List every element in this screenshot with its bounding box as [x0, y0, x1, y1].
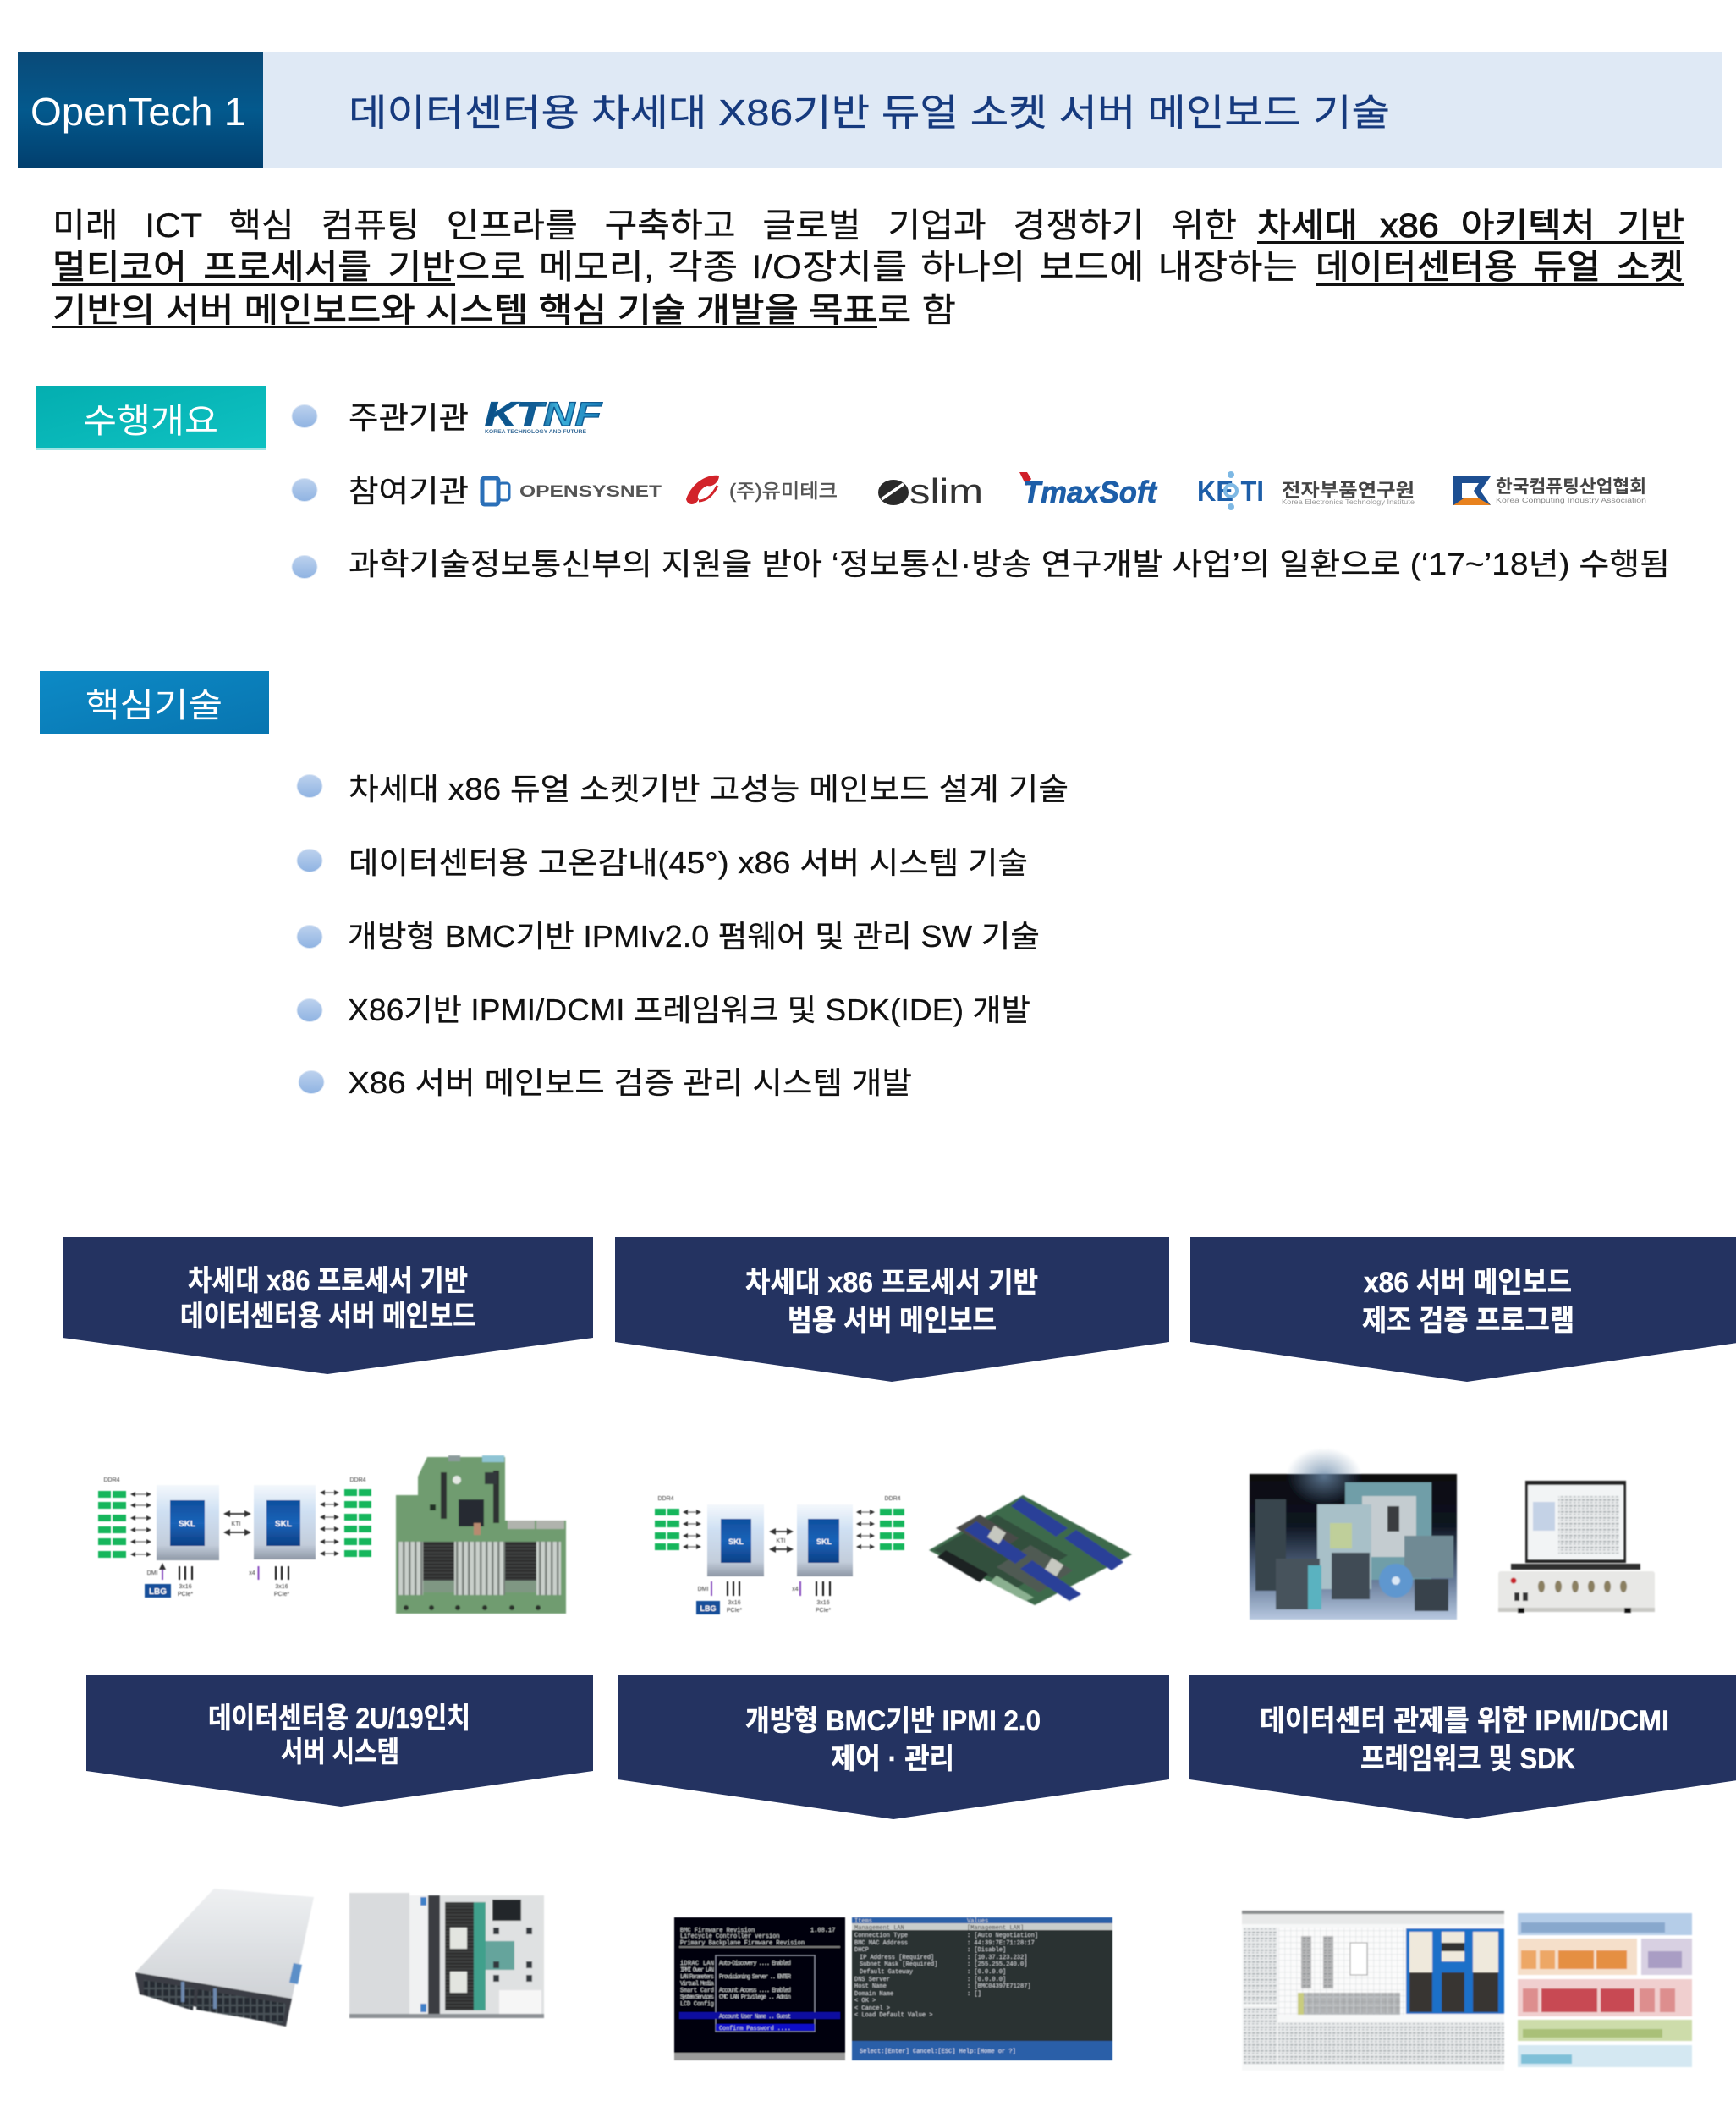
BMC configuration terminal screenshot: Domain Name — [854, 1991, 893, 1998]
BMC configuration terminal screenshot — [852, 1917, 1112, 2060]
KTI link — [772, 1532, 790, 1549]
PCIe and DMI links: 3x16 — [728, 1600, 741, 1606]
PCIe and DMI links: DMI — [698, 1587, 708, 1592]
BIOS console screenshot: 1.08.17 — [810, 1928, 835, 1934]
banner: verification program: x86 서버 메인보드 — [1364, 1267, 1572, 1299]
banner: 2U server system: 서버 시스템 — [281, 1736, 399, 1768]
BIOS console screenshot: LCD Config — [680, 2001, 714, 2008]
framework architecture block diagram — [1518, 1913, 1692, 2067]
core technology list — [297, 772, 1069, 1100]
banner: general purpose mainboard — [615, 1237, 1169, 1382]
architecture diagram 1: DDR4 — [103, 1477, 120, 1483]
CPU 2: SKL — [816, 1537, 832, 1546]
PCIe and DMI links: PCIe* — [178, 1592, 193, 1598]
PCIe and DMI links: LBG — [700, 1604, 716, 1613]
logo: OPENSYSNET: OPENSYSNET — [519, 483, 662, 501]
banner: 2U server system: 데이터센터용 2U/19인치 — [208, 1702, 470, 1735]
intro paragraph: 데이터센터용 듀얼 소켓 — [1316, 249, 1684, 286]
KTI link — [227, 1514, 248, 1532]
BMC configuration terminal screenshot: Items — [854, 1918, 872, 1925]
BIOS console screenshot: Primary Backplane Firmware Revision — [680, 1940, 805, 1947]
PCIe and DMI links: 3x16 — [179, 1584, 192, 1590]
logo: TmaxSoft: TmaxSoft — [1023, 475, 1158, 509]
BIOS console screenshot: CMC LAN Privilege .. Admin — [719, 1994, 791, 2001]
banner: 2U server system — [86, 1675, 593, 1807]
bullet — [292, 479, 317, 501]
BMC configuration terminal screenshot: DHCP — [854, 1947, 869, 1954]
BMC configuration terminal screenshot: < Load Default Value > — [854, 2012, 932, 2019]
BIOS console screenshot: Provisioning Server .. ENTER — [719, 1974, 792, 1981]
BIOS console screenshot: IPMI Over LAN — [680, 1967, 714, 1974]
server chassis open top view — [349, 1893, 544, 2018]
banner: general purpose mainboard: 범용 서버 메인보드 — [788, 1305, 997, 1337]
intro paragraph: 으로 메모리, 각종 I/O장치를 하나의 보드에 내장하는 — [455, 249, 1298, 286]
header bar — [18, 52, 1722, 168]
BMC configuration terminal screenshot: : [Auto Negotiation] — [967, 1933, 1038, 1939]
logo: OPENSYSNET — [482, 478, 662, 504]
CPU 1 — [707, 1504, 764, 1576]
BIOS console screenshot: LAN Parameters — [680, 1974, 714, 1981]
logo: 한국컴퓨팅산업협회: 한국컴퓨팅산업협회 — [1496, 477, 1646, 497]
banner: open BMC IPMI — [618, 1675, 1169, 1819]
BIOS console screenshot: Account User Name .. Guest — [719, 2014, 791, 2021]
PCIe and DMI links: 3x16 — [816, 1600, 830, 1606]
bullet — [292, 404, 317, 428]
header title panel — [263, 52, 1722, 168]
PCIe and DMI links: x4 — [249, 1570, 255, 1576]
overview item: lead organisation — [292, 396, 603, 435]
architecture diagram 1 — [98, 1477, 371, 1598]
architecture diagram 2: DDR4 — [657, 1496, 674, 1502]
BMC configuration terminal screenshot: Values — [967, 1918, 988, 1925]
CPU 1: SKL — [728, 1537, 744, 1546]
DDR4 right modules — [344, 1489, 371, 1557]
BIOS console screenshot: iDRAC LAN — [680, 1961, 714, 1967]
PCIe and DMI links — [696, 1581, 831, 1614]
CPU 1: SKL — [179, 1520, 195, 1529]
header label panel: OpenTech 1: OpenTech 1 — [30, 90, 246, 134]
intro paragraph — [52, 207, 1684, 329]
DDR4 right modules — [880, 1509, 904, 1550]
logo: 한국컴퓨팅산업협회: Korea Computing Industry Association — [1496, 497, 1646, 504]
header label panel: OpenTech 1 — [18, 52, 263, 168]
logo: eslim: slim — [909, 471, 983, 511]
PCIe and DMI links: DMI — [147, 1570, 157, 1576]
PCIe and DMI links: PCIe* — [816, 1608, 831, 1614]
banner: verification program: 제조 검증 프로그램 — [1362, 1305, 1574, 1337]
logo: 한국컴퓨팅산업협회 — [1453, 476, 1646, 505]
BIOS console screenshot: Account Access .... Enabled — [719, 1988, 791, 1994]
item 2: 데이터센터용 고온감내(45°) x86 서버 시스템 기술 — [349, 845, 1028, 880]
architecture diagram 2: DDR4 — [884, 1496, 901, 1502]
BMC configuration terminal screenshot: BMC MAC Address — [854, 1940, 908, 1947]
logo: KTNF: KTNF — [485, 396, 603, 433]
item 3: 개방형 BMC기반 IPMIv2.0 펌웨어 및 관리 SW 기술 — [348, 919, 1040, 954]
banner: datacenter mainboard — [63, 1237, 593, 1374]
BIOS console screenshot: Lifecycle Controller version — [680, 1933, 780, 1940]
BMC configuration terminal screenshot: : [BMC04397E71287] — [967, 1983, 1031, 1990]
header title panel: 데이터센터용 차세대 X86기반 듀얼 소켓 서버 메인보드 기술 — [349, 92, 1390, 134]
CPU 1 — [157, 1485, 219, 1560]
banner: open BMC IPMI: 제어 · 관리 — [831, 1743, 954, 1775]
intro paragraph: 기반의 서버 메인보드와 시스템 핵심 기술 개발을 목표 — [52, 292, 877, 329]
framework tool screenshot — [1242, 1911, 1504, 2071]
BMC configuration terminal screenshot: : [Disable] — [967, 1947, 1006, 1954]
bullet — [292, 555, 317, 579]
logo: KETI — [1197, 471, 1415, 510]
mainboard photo 2 — [929, 1495, 1132, 1605]
architecture diagram 2 — [655, 1496, 904, 1614]
BIOS console screenshot: Confirm Password .... — [719, 2026, 791, 2032]
intro paragraph: 미래 ICT 핵심 컴퓨팅 인프라를 구축하고 글로벌 기업과 경쟁하기 위한 — [52, 207, 1237, 245]
BMC configuration terminal screenshot: [Management LAN] — [967, 1925, 1024, 1932]
logo: KETI: Korea Electronics Technology Institute — [1282, 498, 1415, 506]
logo: KETI: KE TI — [1197, 476, 1264, 508]
overview item: participating organisations: 참여기관 — [349, 474, 469, 509]
BIOS console screenshot: System Services — [680, 1994, 714, 2001]
PCIe and DMI links: 3x16 — [275, 1584, 288, 1590]
BMC configuration terminal screenshot: Default Gateway — [860, 1969, 913, 1976]
BMC configuration terminal screenshot: : [10.37.123.232] — [967, 1955, 1027, 1961]
server chassis front view — [135, 1889, 314, 2027]
BMC configuration terminal screenshot: Host Name — [854, 1983, 887, 1990]
BMC configuration terminal screenshot: < Cancel > — [854, 2005, 890, 2012]
logo: KETI: 전자부품연구원 — [1282, 480, 1415, 501]
section tag: 수행개요: 수행개요 — [83, 403, 218, 440]
BMC configuration terminal screenshot: < OK > — [854, 1998, 876, 2005]
banner: IPMI/DCMI framework: 데이터센터 관제를 위한 IPMI/DCMI — [1260, 1705, 1669, 1737]
BIOS console screenshot: Virtual Media — [680, 1981, 714, 1988]
BIOS console screenshot — [674, 1917, 845, 2060]
banner: datacenter mainboard: 데이터센터용 서버 메인보드 — [180, 1301, 476, 1333]
BIOS console screenshot: BMC Firmware Revision — [680, 1928, 755, 1934]
BMC configuration terminal screenshot: : [255.255.240.0] — [967, 1961, 1027, 1968]
banner: IPMI/DCMI framework: 프레임워크 및 SDK — [1360, 1743, 1575, 1775]
KTI link: KTI — [232, 1521, 240, 1527]
PCIe and DMI links: PCIe* — [727, 1608, 742, 1614]
CPU 2: SKL — [275, 1520, 292, 1529]
BMC configuration terminal screenshot: : [0.0.0.0] — [967, 1969, 1006, 1976]
section tag: 핵심기술 — [40, 671, 269, 734]
control system photo — [1250, 1448, 1457, 1620]
BMC configuration terminal screenshot: : [0.0.0.0] — [967, 1977, 1006, 1983]
banner: verification program — [1190, 1237, 1736, 1382]
banner: general purpose mainboard: 차세대 x86 프로세서 기반 — [745, 1267, 1038, 1299]
item 5: X86 서버 메인보드 검증 관리 시스템 개발 — [348, 1065, 912, 1100]
intro paragraph: 차세대 x86 아키텍처 기반 — [1257, 207, 1684, 245]
BMC configuration terminal screenshot: Subnet Mask [Required] — [860, 1961, 937, 1968]
KTI link: KTI — [777, 1538, 785, 1544]
BMC configuration terminal screenshot: : [] — [967, 1991, 981, 1998]
item 4: X86기반 IPMI/DCMI 프레임워크 및 SDK(IDE) 개발 — [348, 993, 1030, 1027]
overview item: lead organisation: 주관기관 — [349, 400, 469, 435]
BIOS console screenshot: Smart Card — [680, 1988, 714, 1994]
BMC configuration terminal screenshot: IP Address [Required] — [860, 1955, 934, 1961]
BIOS console screenshot: Auto-Discovery .... Enabled — [719, 1961, 791, 1967]
BMC configuration terminal screenshot: Select:[Enter] Cancel:[ESC] Help:[Home or ?] — [860, 2049, 1016, 2055]
intro paragraph: 로 함 — [877, 292, 956, 329]
DDR4 left modules — [655, 1509, 679, 1550]
DDR4 left modules — [98, 1491, 126, 1558]
CPU 2 — [797, 1504, 853, 1576]
CPU 2 — [254, 1485, 316, 1559]
logo: KTNF: KOREA TECHNOLOGY AND FUTURE — [485, 429, 587, 435]
PCIe and DMI links: PCIe* — [274, 1592, 289, 1598]
banner: IPMI/DCMI framework — [1189, 1675, 1736, 1819]
PCIe and DMI links: x4 — [792, 1587, 799, 1592]
BMC configuration terminal screenshot: Management LAN — [854, 1925, 904, 1932]
overview item: funding note: 과학기술정보통신부의 지원을 받아 ‘정보통신·방송 연구개발 사업’의 일환으로 (‘17~’18년) 수행됨 — [349, 547, 1670, 581]
intro paragraph: 멀티코어 프로세서를 기반 — [52, 249, 455, 286]
logo: eslim — [878, 471, 983, 511]
mainboard photo 1 — [396, 1455, 566, 1614]
architecture diagram 1: DDR4 — [349, 1477, 366, 1483]
BMC configuration terminal screenshot: Connection Type — [854, 1933, 908, 1939]
banner: open BMC IPMI: 개방형 BMC기반 IPMI 2.0 — [745, 1705, 1041, 1737]
PCIe and DMI links — [145, 1566, 289, 1598]
overview item: participating organisations — [292, 471, 1646, 511]
item 1: 차세대 x86 듀얼 소켓기반 고성능 메인보드 설계 기술 — [349, 772, 1069, 806]
banner: datacenter mainboard: 차세대 x86 프로세서 기반 — [188, 1265, 468, 1297]
logo: 유미테크 — [686, 476, 838, 504]
section tag: 핵심기술: 핵심기술 — [85, 687, 222, 724]
BMC configuration terminal screenshot: : 44:39:7E:71:28:17 — [967, 1940, 1035, 1947]
PCIe and DMI links: LBG — [149, 1587, 167, 1597]
section tag: 수행개요 — [36, 386, 266, 450]
BMC configuration terminal screenshot: DNS Server — [854, 1977, 890, 1983]
measurement instrument with laptop — [1498, 1481, 1655, 1613]
logo: 유미테크: (주)유미테크 — [729, 480, 838, 502]
